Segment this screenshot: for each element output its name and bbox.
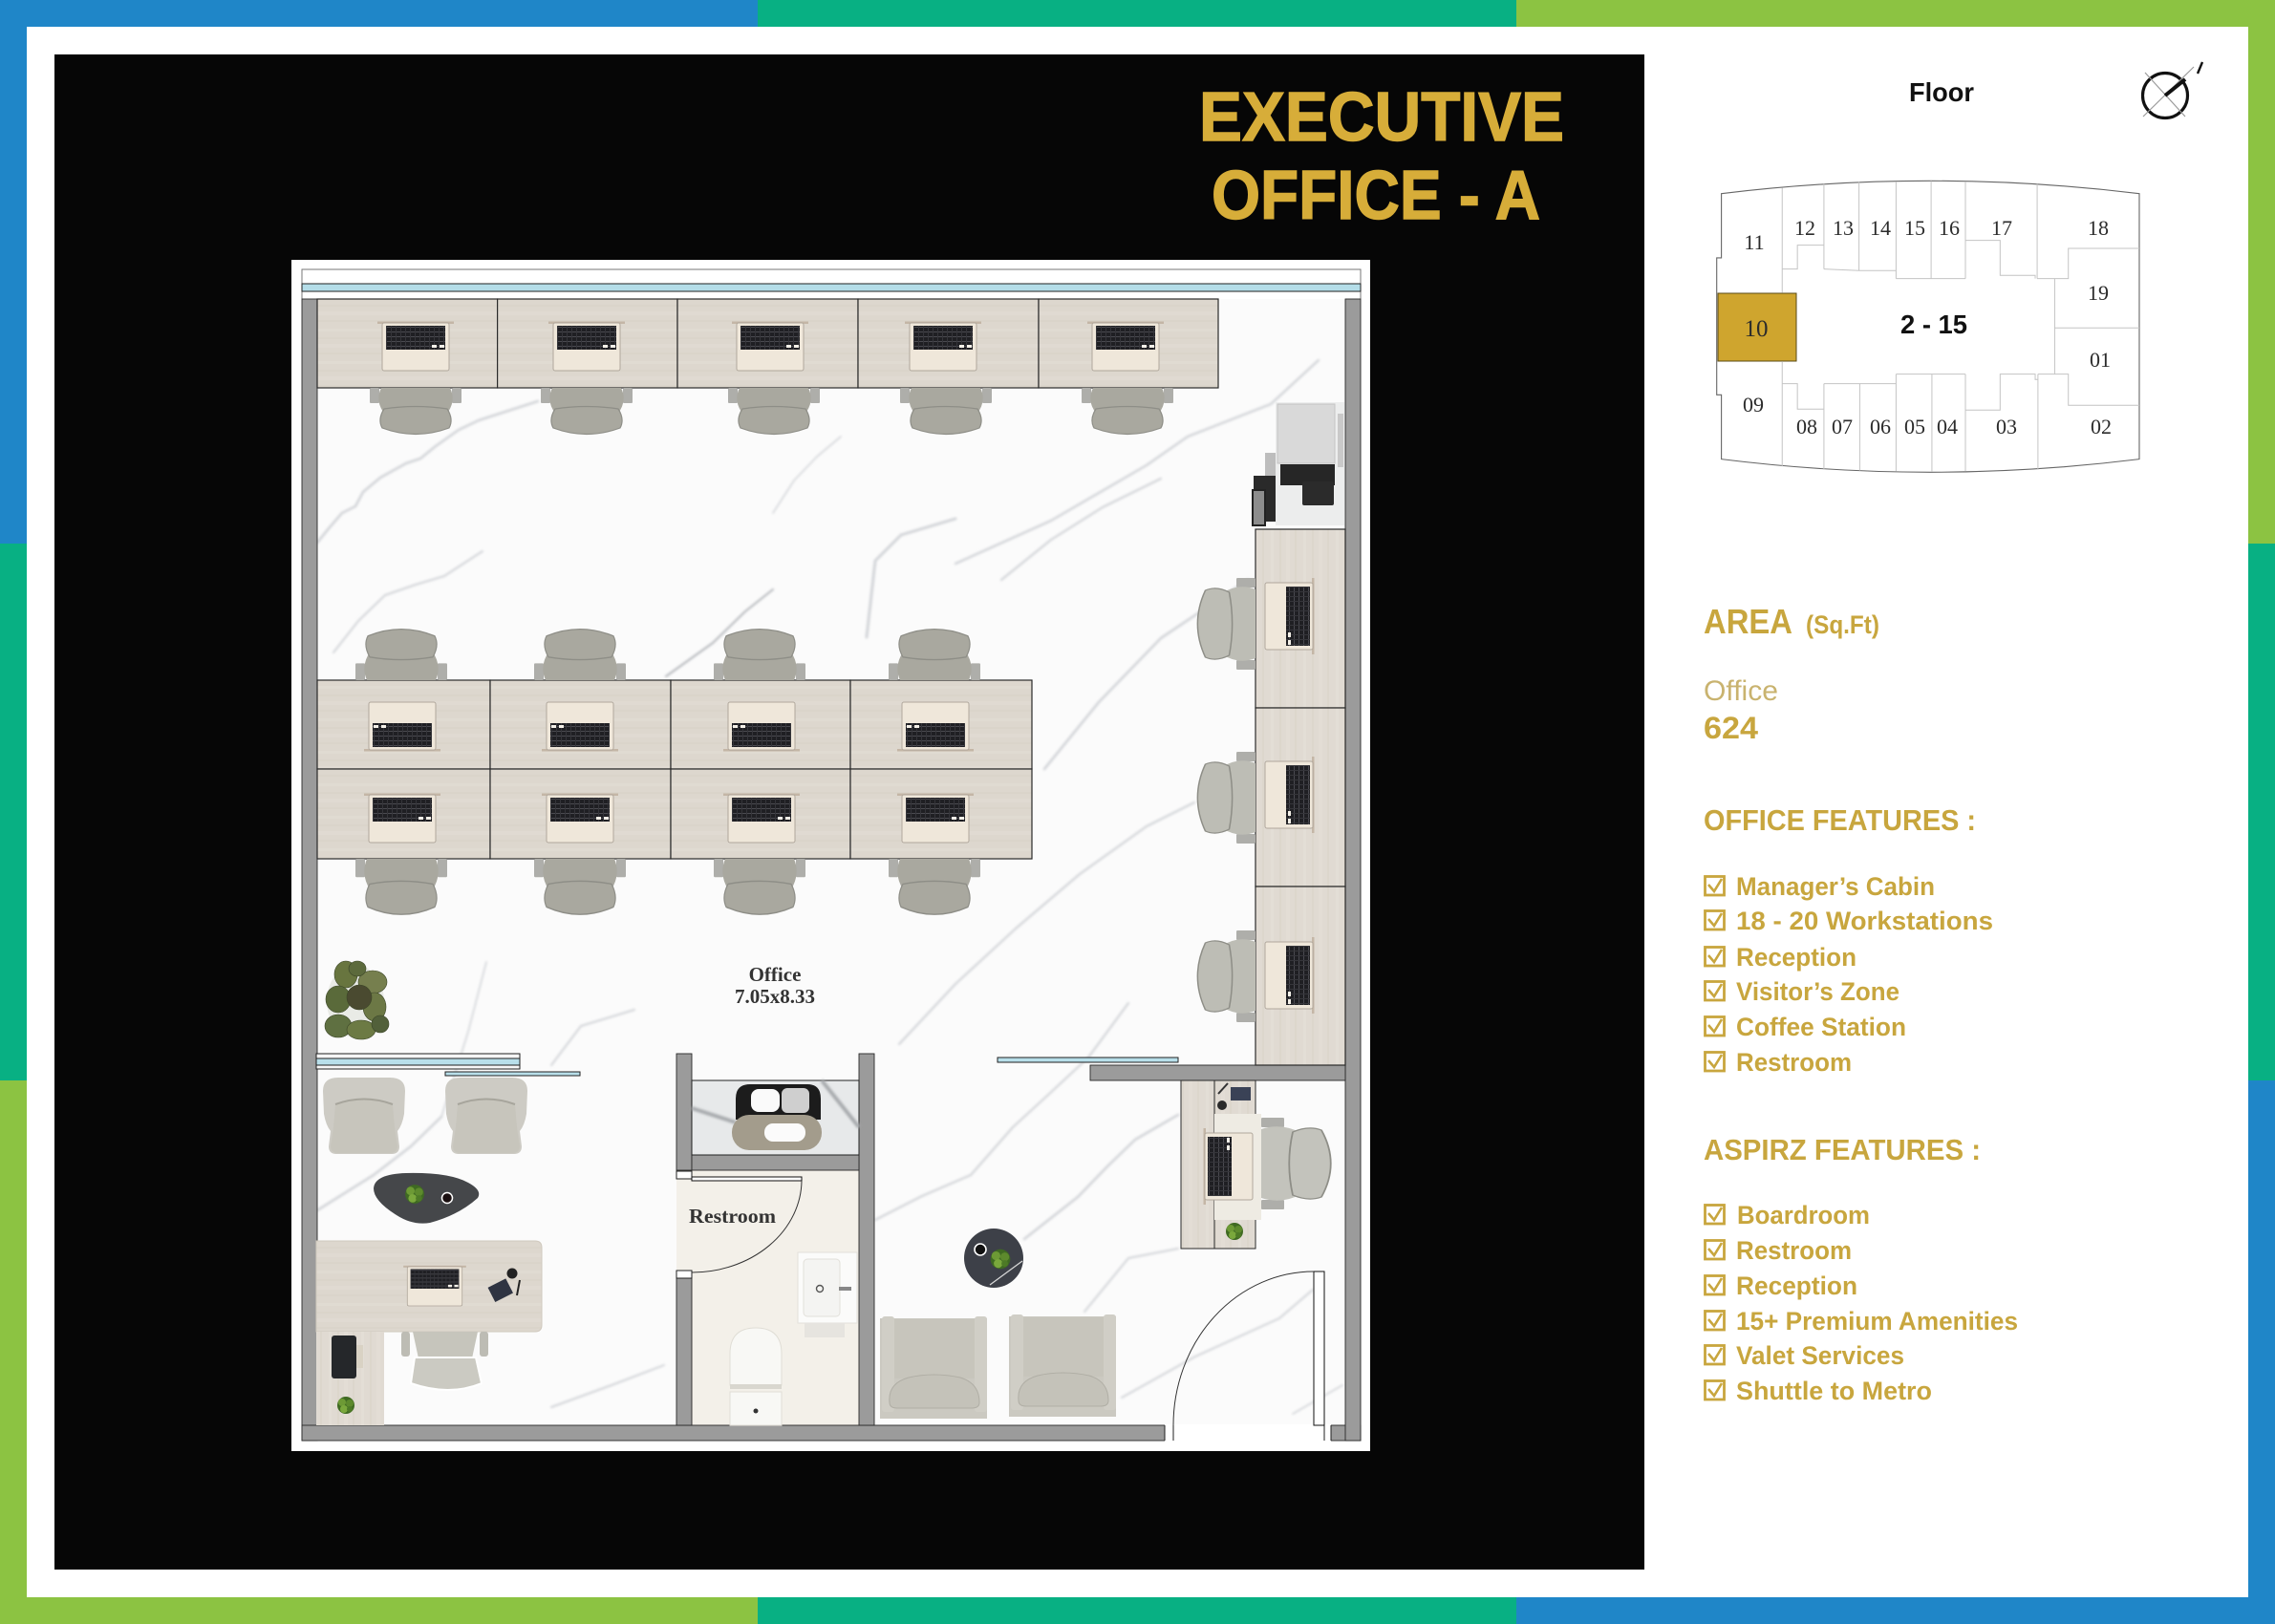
office room label: Office — [749, 963, 801, 986]
reception armchairs — [323, 1078, 527, 1154]
aspirz features heading: ASPIRZ FEATURES : — [1704, 1133, 1981, 1166]
office features list: 18 - 20 Workstations — [1736, 907, 1993, 935]
restroom door — [676, 1171, 802, 1278]
panel: floor plan — [291, 260, 1370, 1451]
unit numbers: 07 — [1832, 415, 1853, 438]
office features list: Visitor’s Zone — [1736, 977, 1899, 1006]
unit numbers: 10 — [1745, 316, 1768, 342]
title: EXECUTIVE — [1199, 79, 1564, 156]
unit numbers: 01 — [2090, 348, 2111, 372]
unit numbers: 09 — [1743, 393, 1764, 417]
panel: black plan background — [54, 54, 1644, 1570]
round side table — [964, 1229, 1023, 1288]
window strip — [302, 269, 1361, 299]
unit numbers: 14 — [1870, 216, 1891, 240]
unit numbers: 08 — [1796, 415, 1817, 438]
aspirz features list — [1705, 1201, 2018, 1405]
area value: 624 — [1704, 711, 1758, 745]
unit numbers: 05 — [1904, 415, 1925, 438]
unit numbers: 03 — [1996, 415, 2017, 438]
manager side unit — [316, 1332, 384, 1425]
office features list: Reception — [1736, 943, 1856, 972]
dark coffee table — [374, 1173, 479, 1224]
right workstation row — [1197, 529, 1345, 1065]
aspirz features list: Restroom — [1736, 1236, 1852, 1265]
key plan — [1717, 181, 2139, 472]
unit numbers: 02 — [2091, 415, 2112, 438]
area heading — [1704, 602, 1879, 641]
unit numbers: 13 — [1833, 216, 1854, 240]
coffee machine — [1253, 402, 1344, 525]
lobby glass partition — [998, 1058, 1178, 1062]
restroom floor — [676, 1170, 859, 1425]
reception chair — [1261, 1118, 1331, 1209]
area value: Office — [1704, 675, 1778, 707]
unit numbers: 06 — [1870, 415, 1891, 438]
restroom label: Restroom — [689, 1205, 777, 1228]
icon: compass — [2142, 62, 2202, 118]
aspirz features list: 15+ Premium Amenities — [1736, 1307, 2018, 1336]
wash basin — [798, 1252, 857, 1337]
office features list: Coffee Station — [1736, 1013, 1906, 1041]
office room label — [735, 963, 815, 1008]
toilet — [730, 1328, 782, 1425]
reception desk — [1181, 1080, 1261, 1249]
walls — [302, 299, 1361, 1441]
marble floor — [317, 299, 1345, 1425]
unit outlines — [1717, 181, 2139, 472]
manager desk — [316, 1241, 542, 1332]
aspirz features list: Shuttle to Metro — [1736, 1377, 1932, 1405]
large potted plant — [325, 961, 389, 1039]
entrance door — [1165, 1271, 1331, 1442]
area value — [1704, 675, 1778, 745]
area heading: AREA — [1704, 602, 1792, 641]
office features list: Restroom — [1736, 1048, 1852, 1077]
reception glass partition — [316, 1054, 580, 1076]
office features list: Manager’s Cabin — [1736, 872, 1935, 901]
aspirz features list: Boardroom — [1737, 1201, 1870, 1229]
floor heading: Floor — [1909, 77, 1974, 107]
office features list — [1705, 872, 1993, 1077]
top workstation row — [317, 299, 1218, 434]
unit numbers — [1743, 216, 2112, 438]
central workstation cluster — [317, 630, 1032, 914]
unit numbers: 04 — [1937, 415, 1958, 438]
floor range: 2 - 15 — [1900, 310, 1967, 339]
office room label: 7.05x8.33 — [735, 985, 815, 1008]
title — [1199, 79, 1564, 234]
area heading: (Sq.Ft) — [1806, 610, 1879, 639]
unit numbers: 16 — [1939, 216, 1960, 240]
unit numbers: 18 — [2088, 216, 2109, 240]
unit numbers: 17 — [1991, 216, 2012, 240]
unit numbers: 15 — [1904, 216, 1925, 240]
unit numbers: 19 — [2088, 281, 2109, 305]
office features heading: OFFICE FEATURES : — [1704, 803, 1976, 837]
title: OFFICE - A — [1212, 158, 1540, 234]
coffee niche — [692, 1080, 859, 1155]
aspirz features list: Reception — [1736, 1271, 1857, 1300]
highlighted unit 10 — [1718, 293, 1796, 361]
unit numbers: 11 — [1744, 230, 1765, 254]
lounge armchairs — [880, 1314, 1116, 1419]
aspirz features list: Valet Services — [1736, 1341, 1904, 1370]
manager chair — [401, 1332, 488, 1390]
unit numbers: 12 — [1794, 216, 1815, 240]
